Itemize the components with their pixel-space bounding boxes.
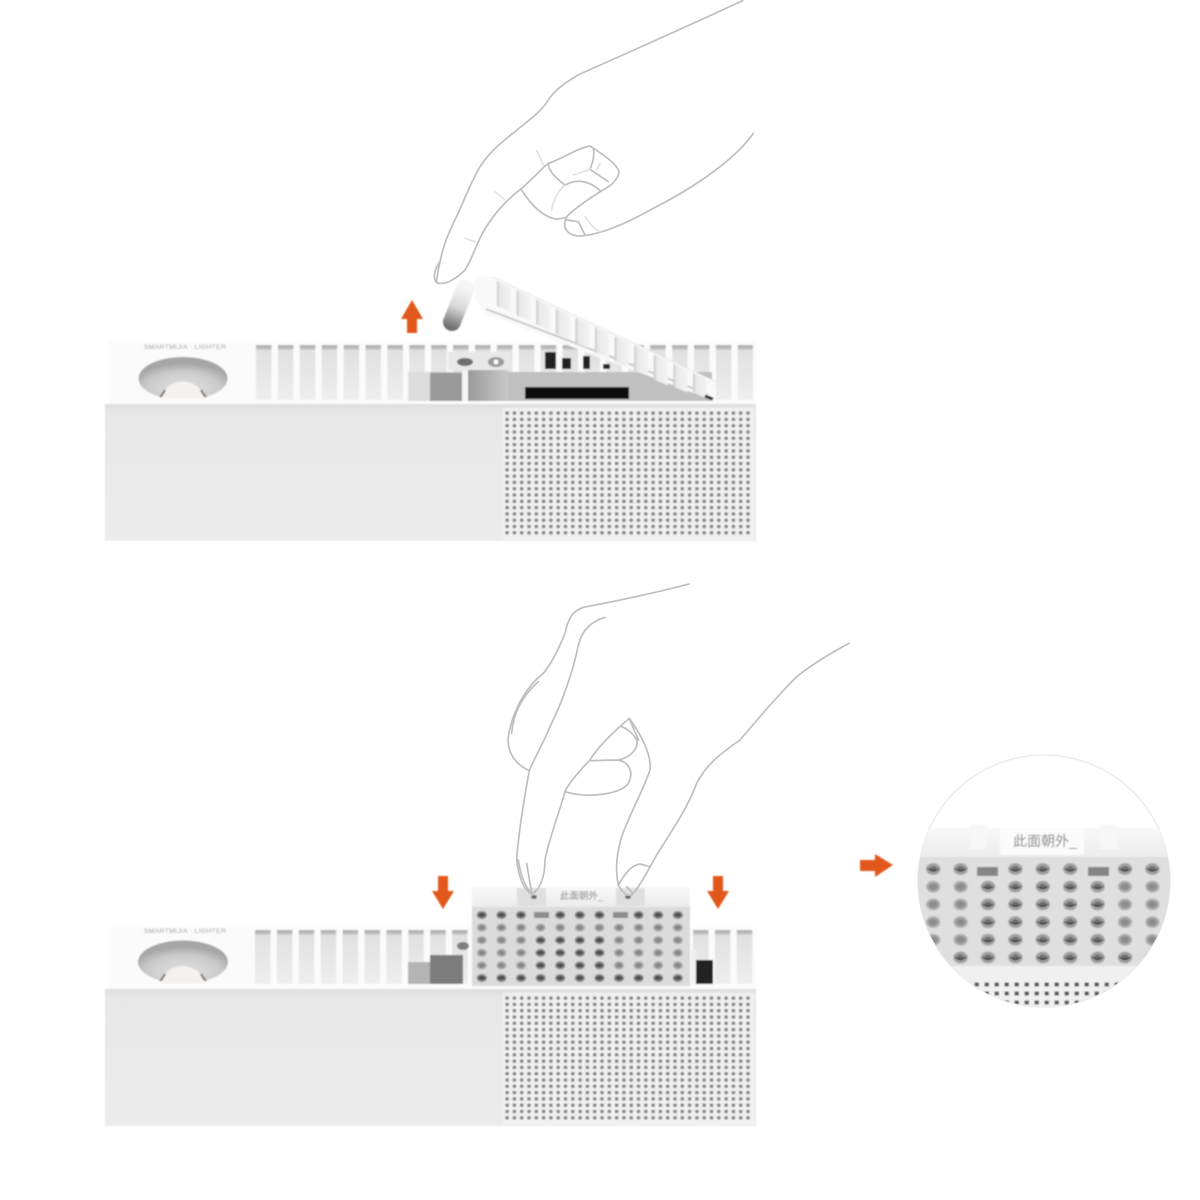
speaker grille — [503, 408, 754, 540]
label band — [921, 828, 1167, 857]
button ring — [138, 356, 228, 398]
button ring — [137, 940, 229, 983]
front panel — [105, 989, 756, 1126]
device top deck — [108, 342, 756, 408]
arrow to detail view — [860, 854, 893, 877]
lifted lid — [452, 276, 716, 400]
up arrow — [401, 300, 423, 333]
device label: SMARTMIJIA · LIGHTER — [144, 344, 226, 351]
perforated panel — [910, 857, 1180, 967]
right compartment — [691, 950, 713, 984]
left compartment — [408, 942, 469, 984]
filter module — [472, 887, 690, 986]
down arrow right — [707, 876, 729, 909]
vent slots — [255, 930, 753, 984]
open compartment — [408, 352, 712, 401]
front panel — [105, 404, 756, 541]
lower device edge — [952, 966, 1136, 1006]
hand outline — [434, 1, 753, 283]
step 2: device with filter inserted — [105, 876, 756, 1126]
hand outline — [508, 584, 849, 895]
device label: SMARTMIJIA · LIGHTER — [144, 928, 226, 935]
device top deck — [108, 927, 756, 993]
filter label: 此面朝外_ — [560, 890, 604, 902]
step 1: hand lifting the lid — [434, 1, 753, 283]
speaker grille — [503, 993, 754, 1125]
down arrow left — [432, 876, 454, 909]
vent slots — [255, 345, 753, 400]
step 2: hand placing the filter — [508, 584, 849, 895]
detail inset circle — [910, 755, 1180, 1011]
detail label: 此面朝外_ — [1013, 833, 1077, 849]
step 1: device with opened lid — [105, 276, 756, 541]
clips — [970, 825, 987, 849]
